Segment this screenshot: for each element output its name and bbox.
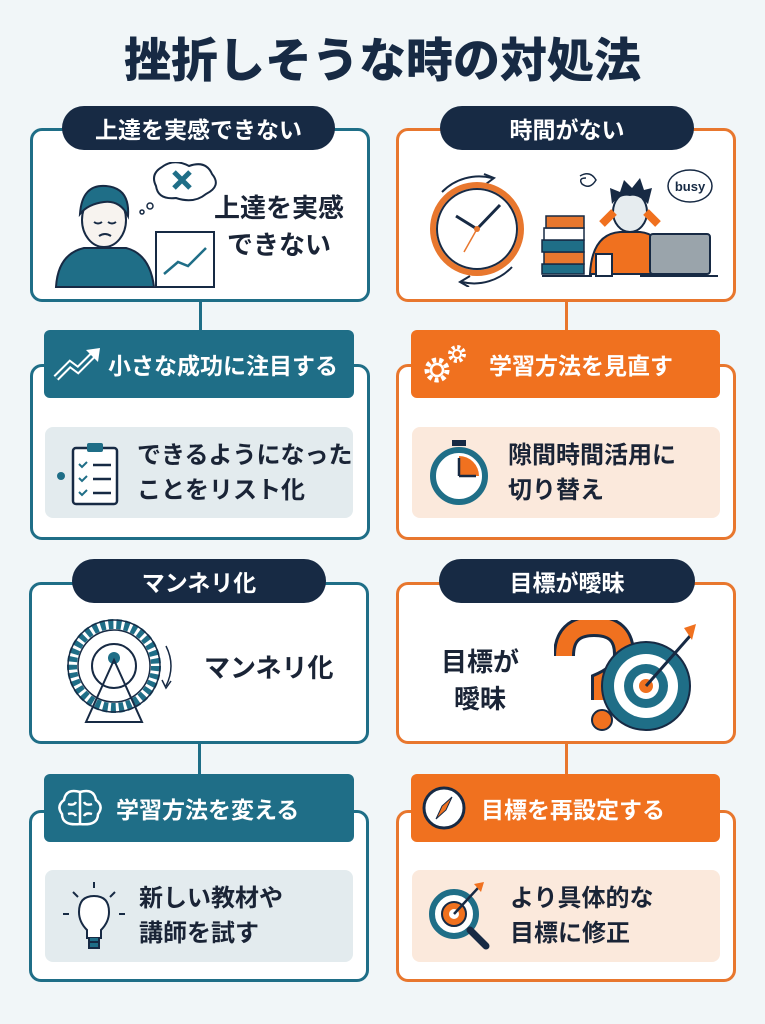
problem box (396, 128, 736, 302)
text: problem (214, 193, 344, 260)
action bar (44, 330, 354, 398)
icon: compass (422, 786, 466, 830)
inner: action detail (45, 427, 353, 518)
icon: brain (58, 790, 102, 826)
pill heading (62, 106, 335, 150)
pill heading (439, 559, 695, 603)
action bar: 学習方法を変える (116, 797, 299, 823)
connector (199, 302, 202, 336)
icon: target magnifier (429, 882, 490, 950)
inner: action detail (412, 427, 720, 518)
inner: action detail: より具体的な (510, 885, 654, 912)
lower box (30, 364, 370, 540)
action bar (411, 774, 720, 842)
lower box (396, 810, 736, 982)
inner: action detail: 新しい教材や (139, 885, 283, 912)
problem box (29, 582, 369, 744)
connector (198, 744, 201, 776)
text: problem: 目標が (441, 647, 519, 677)
icon: checklist (57, 443, 118, 506)
icon: stopwatch (430, 440, 488, 505)
panel: マンネリ化 (29, 559, 369, 982)
icon: busy person (541, 169, 718, 277)
title: 挫折しそうな時の対処法 (124, 34, 641, 87)
lower box (396, 364, 736, 540)
inner: action detail: 講師を試す (139, 920, 259, 947)
panel: 時間がない (396, 106, 736, 540)
lower box (29, 810, 369, 982)
icon: light bulb (63, 882, 125, 949)
text: problem: できない (227, 230, 331, 260)
problem box (396, 582, 736, 744)
icon: hamster wheel (67, 619, 172, 723)
action bar: 目標を再設定する (481, 797, 665, 823)
inner: action detail: 切り替え (508, 476, 604, 504)
action bar: 学習方法を見直す (489, 353, 673, 379)
pill heading: 時間がない (510, 117, 624, 143)
pill heading: 上達を実感できない (95, 117, 302, 143)
inner: action detail (412, 870, 720, 962)
text: problem (441, 647, 519, 714)
inner: action detail: 目標に修正 (510, 920, 630, 947)
inner: action detail: 隙間時間活用に (508, 442, 676, 468)
icon: clock (430, 173, 524, 287)
text: problem: 上達を実感 (214, 193, 344, 223)
icon: question and target (554, 620, 696, 731)
panel: 目標が曖昧 (396, 559, 736, 982)
action bar (411, 330, 720, 398)
inner: action detail: できるようになった (137, 442, 353, 468)
icon: gears (424, 345, 466, 382)
action bar: 小さな成功に注目する (108, 353, 338, 379)
pill heading: 目標が曖昧 (510, 570, 624, 596)
icon: busy person: busy (675, 179, 706, 194)
text: problem: 曖昧 (454, 684, 506, 714)
connector (565, 744, 568, 776)
text: problem: マンネリ化 (204, 653, 333, 683)
inner: action detail: ことをリスト化 (137, 476, 305, 504)
pill heading (440, 106, 694, 150)
icon: arrow up (54, 348, 100, 380)
pill heading: マンネリ化 (142, 570, 256, 596)
problem box (30, 128, 370, 302)
panel: 上達を実感できない (30, 106, 370, 540)
action bar (44, 774, 354, 842)
pill heading (72, 559, 326, 603)
inner: action detail (45, 870, 353, 962)
icon: sad person with chart (54, 162, 217, 288)
connector (565, 302, 568, 336)
